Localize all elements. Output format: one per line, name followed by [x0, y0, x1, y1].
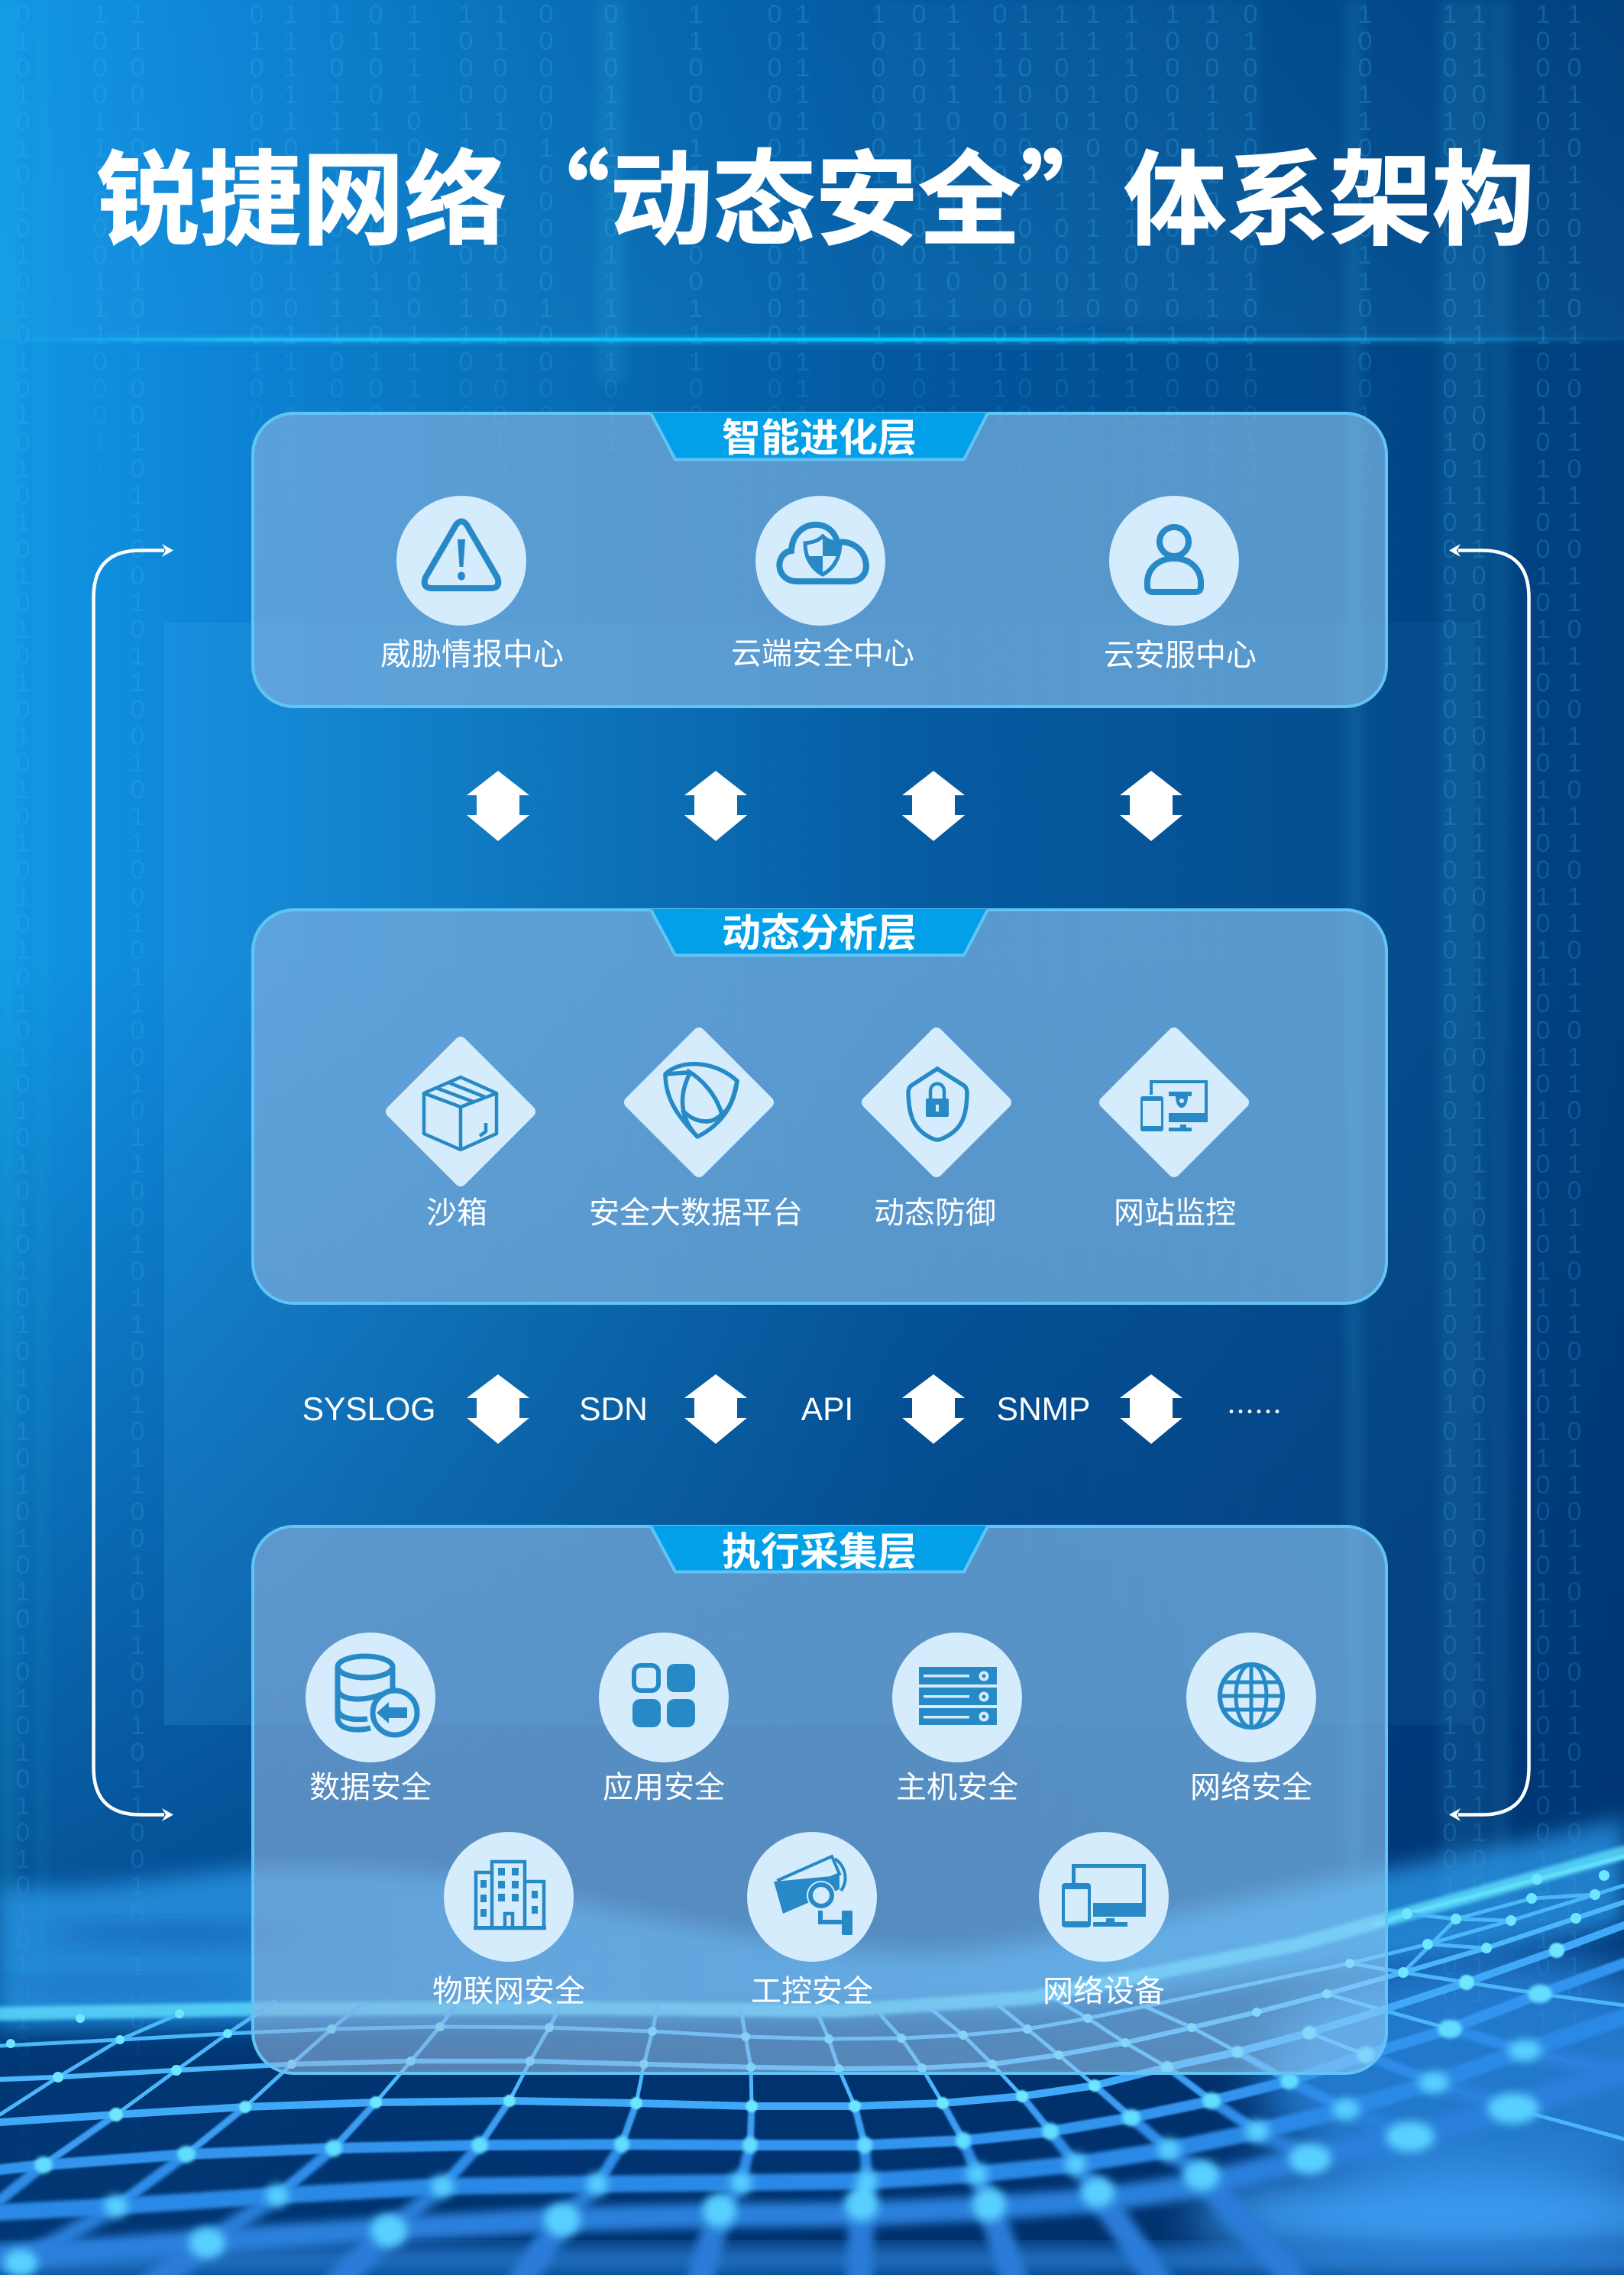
- label: 云安服中心: [1104, 639, 1257, 672]
- item: 主机安全: [843, 1621, 1072, 1820]
- item: 沙箱: [386, 1037, 535, 1230]
- label: 威胁情报中心: [380, 638, 564, 671]
- label: SYSLOG: SYSLOG: [302, 1392, 435, 1428]
- panel: 动态分析层: [251, 901, 1388, 1305]
- item: 威胁情报中心: [380, 496, 564, 671]
- item: 云安服中心: [1104, 496, 1257, 672]
- label: SNMP: SNMP: [997, 1392, 1090, 1428]
- item: 工控安全: [697, 1820, 927, 2019]
- label: 物联网安全: [432, 1975, 585, 2008]
- icon: buildings: [432, 1820, 585, 1973]
- heading tab: 智能进化层: 智能进化层: [722, 406, 917, 463]
- heading tab: 执行采集层: 执行采集层: [722, 1520, 917, 1577]
- heading tab: 智能进化层: [650, 406, 988, 463]
- icon: lock shield: [860, 1026, 1013, 1179]
- item: 数据安全: [256, 1621, 485, 1820]
- mesh floor: [0, 1818, 1624, 2275]
- icon: globe: [1175, 1621, 1328, 1774]
- label: 云端安全中心: [731, 637, 914, 671]
- panel: 执行采集层: [252, 1526, 1388, 2073]
- item: 安全大数据平台: [589, 1027, 803, 1230]
- label: 沙箱: [426, 1196, 487, 1230]
- item: 网站监控: [1059, 1026, 1289, 1225]
- item: 网络安全: [1137, 1621, 1366, 1820]
- label: 主机安全: [896, 1771, 1018, 1804]
- heading tab: 动态分析层: 动态分析层: [722, 901, 917, 958]
- item: 动态防御: [822, 1026, 1051, 1225]
- icon: monitored devices: [1098, 1026, 1250, 1179]
- icon: server rack: [881, 1621, 1034, 1774]
- label: 数据安全: [309, 1771, 432, 1804]
- label: 动态防御: [874, 1196, 996, 1230]
- label: SDN: SDN: [579, 1392, 648, 1428]
- label: 工控安全: [751, 1975, 873, 2008]
- panel: 智能进化层: [251, 406, 1388, 708]
- heading tab: 动态分析层: [650, 901, 988, 958]
- label: API: API: [801, 1392, 853, 1428]
- icon: tablet, monitor and phone: [1027, 1820, 1180, 1973]
- title: 锐捷网络“动态安全”体系架构: [96, 117, 1535, 266]
- icon: database: [294, 1621, 447, 1774]
- item: 网络设备: [989, 1820, 1218, 2019]
- item: 应用安全: [549, 1621, 778, 1820]
- icon: sandbox box: [386, 1037, 535, 1186]
- icon: cloud shield: [755, 496, 885, 626]
- icon: security camera: [736, 1820, 888, 1973]
- item: 物联网安全: [394, 1820, 623, 2019]
- label: ellipsis: ……: [1227, 1390, 1282, 1430]
- heading tab: 执行采集层: [650, 1526, 988, 1576]
- icon: person: [1109, 496, 1239, 626]
- label: 网络安全: [1190, 1771, 1312, 1804]
- label: 安全大数据平台: [589, 1196, 803, 1230]
- label: 网络设备: [1043, 1975, 1165, 2008]
- item: 云端安全中心: [731, 496, 914, 671]
- icon: app grid: [587, 1621, 740, 1774]
- icon: warning triangle: [396, 496, 526, 626]
- label: 网站监控: [1114, 1196, 1236, 1230]
- icon: aperture shield: [624, 1027, 774, 1177]
- label: 应用安全: [603, 1771, 725, 1804]
